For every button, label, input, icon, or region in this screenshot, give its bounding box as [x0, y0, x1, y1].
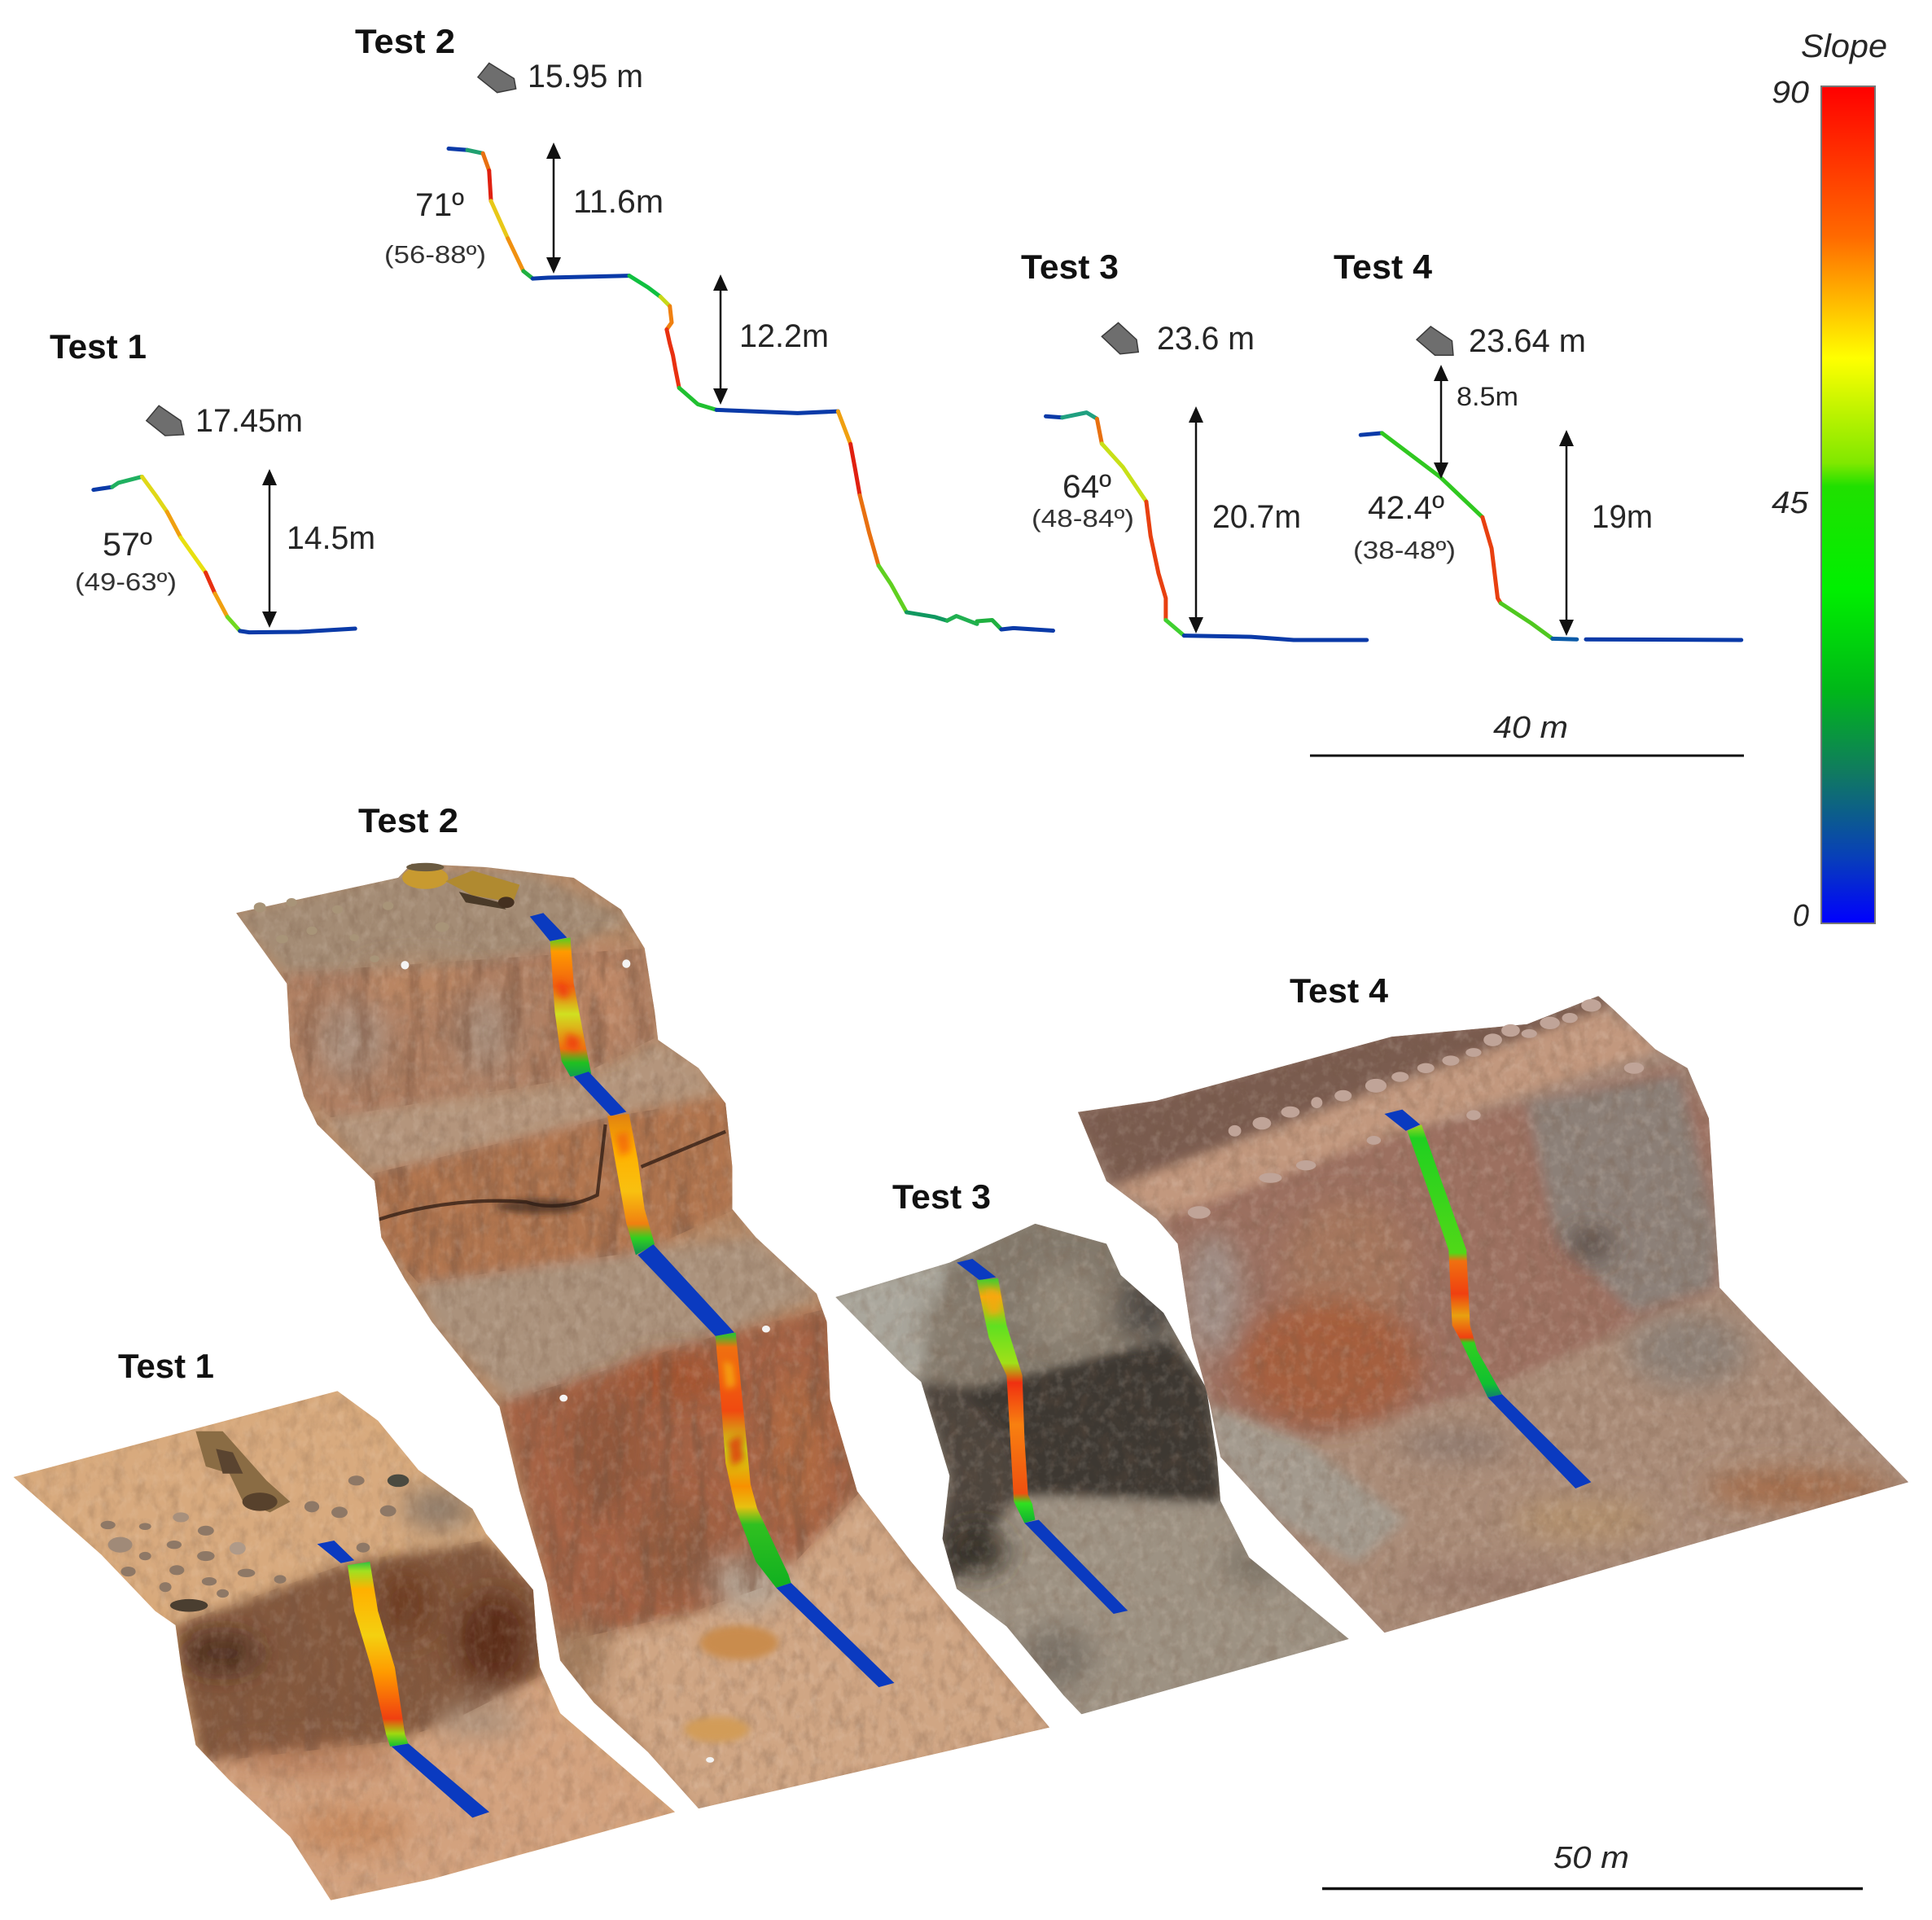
label: Test 1 angle range: (49-63º) — [75, 568, 177, 596]
arrow: Test 4 upper height — [1434, 365, 1448, 479]
profile: Test 4 — [1360, 433, 1741, 640]
cliff streaks — [283, 949, 861, 1643]
arrow: Test 2 middle height — [713, 274, 728, 405]
label: Test 4 lower height: 19m — [1592, 499, 1653, 535]
label: Test 4 upper height: 8.5m — [1457, 382, 1518, 411]
crack — [378, 1124, 725, 1220]
excavator — [195, 1431, 290, 1512]
heading: Test 2 model: Test 2 — [358, 801, 458, 839]
slope strip: Test 3 — [957, 1259, 1128, 1614]
heading: Test 1 model: Test 1 — [118, 1347, 214, 1385]
slope strip: Test 4 — [1384, 1110, 1591, 1488]
heading: Test 2 profile: Test 2 — [355, 22, 455, 60]
label: Test 3 height: 20.7m — [1212, 499, 1301, 535]
label: rock distance Test 4: 23.64 m — [1469, 323, 1586, 359]
heading: Test 1 profile: Test 1 — [50, 327, 147, 366]
arrow: Test 3 height — [1189, 406, 1203, 633]
heading: Test 4 profile: Test 4 — [1334, 248, 1433, 286]
label: Test 2 angle range: (56-88º) — [384, 240, 486, 269]
label: Test 2 middle height: 12.2m — [739, 318, 829, 354]
label: Test 2 angle: 71º — [415, 187, 464, 223]
label: Test 3 angle: 64º — [1062, 469, 1111, 505]
label: rock distance Test 3: 23.6 m — [1157, 321, 1255, 357]
legend: slope colour bar: 45 — [1772, 486, 1809, 520]
boulders — [101, 1475, 409, 1611]
slope strip: Test 2 — [530, 913, 894, 1687]
label: Test 1 height: 14.5m — [287, 520, 375, 556]
terrain model: Test 4 — [1071, 989, 1916, 1636]
excavator — [402, 863, 519, 910]
label: Test 1 angle: 57º — [103, 527, 152, 563]
boulders — [254, 898, 449, 962]
label: rock distance Test 2: 15.95 m — [528, 59, 643, 94]
legend: slope colour bar — [1772, 28, 1887, 933]
label: Test 3 angle range: (48-84º) — [1032, 504, 1134, 533]
icon: rock Test 1 — [147, 405, 184, 436]
profile: Test 3 — [977, 413, 1367, 640]
puddles — [685, 1626, 778, 1742]
icon: rock Test 4 — [1417, 327, 1453, 355]
scale bar: 40 m: 40 m — [1493, 711, 1568, 745]
terrain model: Test 3 — [829, 1219, 1356, 1721]
label: Test 4 angle range: (38-48º) — [1353, 536, 1456, 564]
icon: rock Test 3 — [1102, 322, 1138, 354]
heading: Test 4 model: Test 4 — [1290, 971, 1389, 1010]
survey targets — [401, 959, 770, 1763]
terrain model: Test 1 — [7, 1385, 681, 1907]
arrow: Test 1 height — [262, 469, 277, 628]
terrain model: Test 2 — [230, 857, 1053, 1816]
arrow: Test 2 upper height — [546, 142, 561, 274]
heading: Test 3 profile: Test 3 — [1021, 248, 1119, 286]
slope strip: Test 1 — [318, 1541, 489, 1817]
boulders along berm — [1188, 999, 1644, 1219]
icon: rock Test 2 — [478, 63, 516, 93]
label: Test 4 angle: 42.4º — [1368, 490, 1444, 526]
legend: slope colour bar: 90 — [1772, 76, 1809, 110]
label: rock distance Test 1: 17.45m — [195, 403, 303, 439]
arrow: Test 4 lower height — [1559, 430, 1574, 636]
profile: Test 2 — [449, 149, 977, 624]
heading: Test 3 model: Test 3 — [892, 1177, 991, 1216]
label: Test 2 upper height: 11.6m — [573, 184, 664, 220]
scale bar: 50 m: 50 m — [1553, 1841, 1629, 1875]
legend: slope colour bar: 0 — [1793, 899, 1809, 933]
profile: Test 1 — [94, 476, 355, 633]
legend: slope colour bar: Slope — [1801, 28, 1887, 64]
profile charts: slope cross-sections — [94, 149, 1741, 640]
